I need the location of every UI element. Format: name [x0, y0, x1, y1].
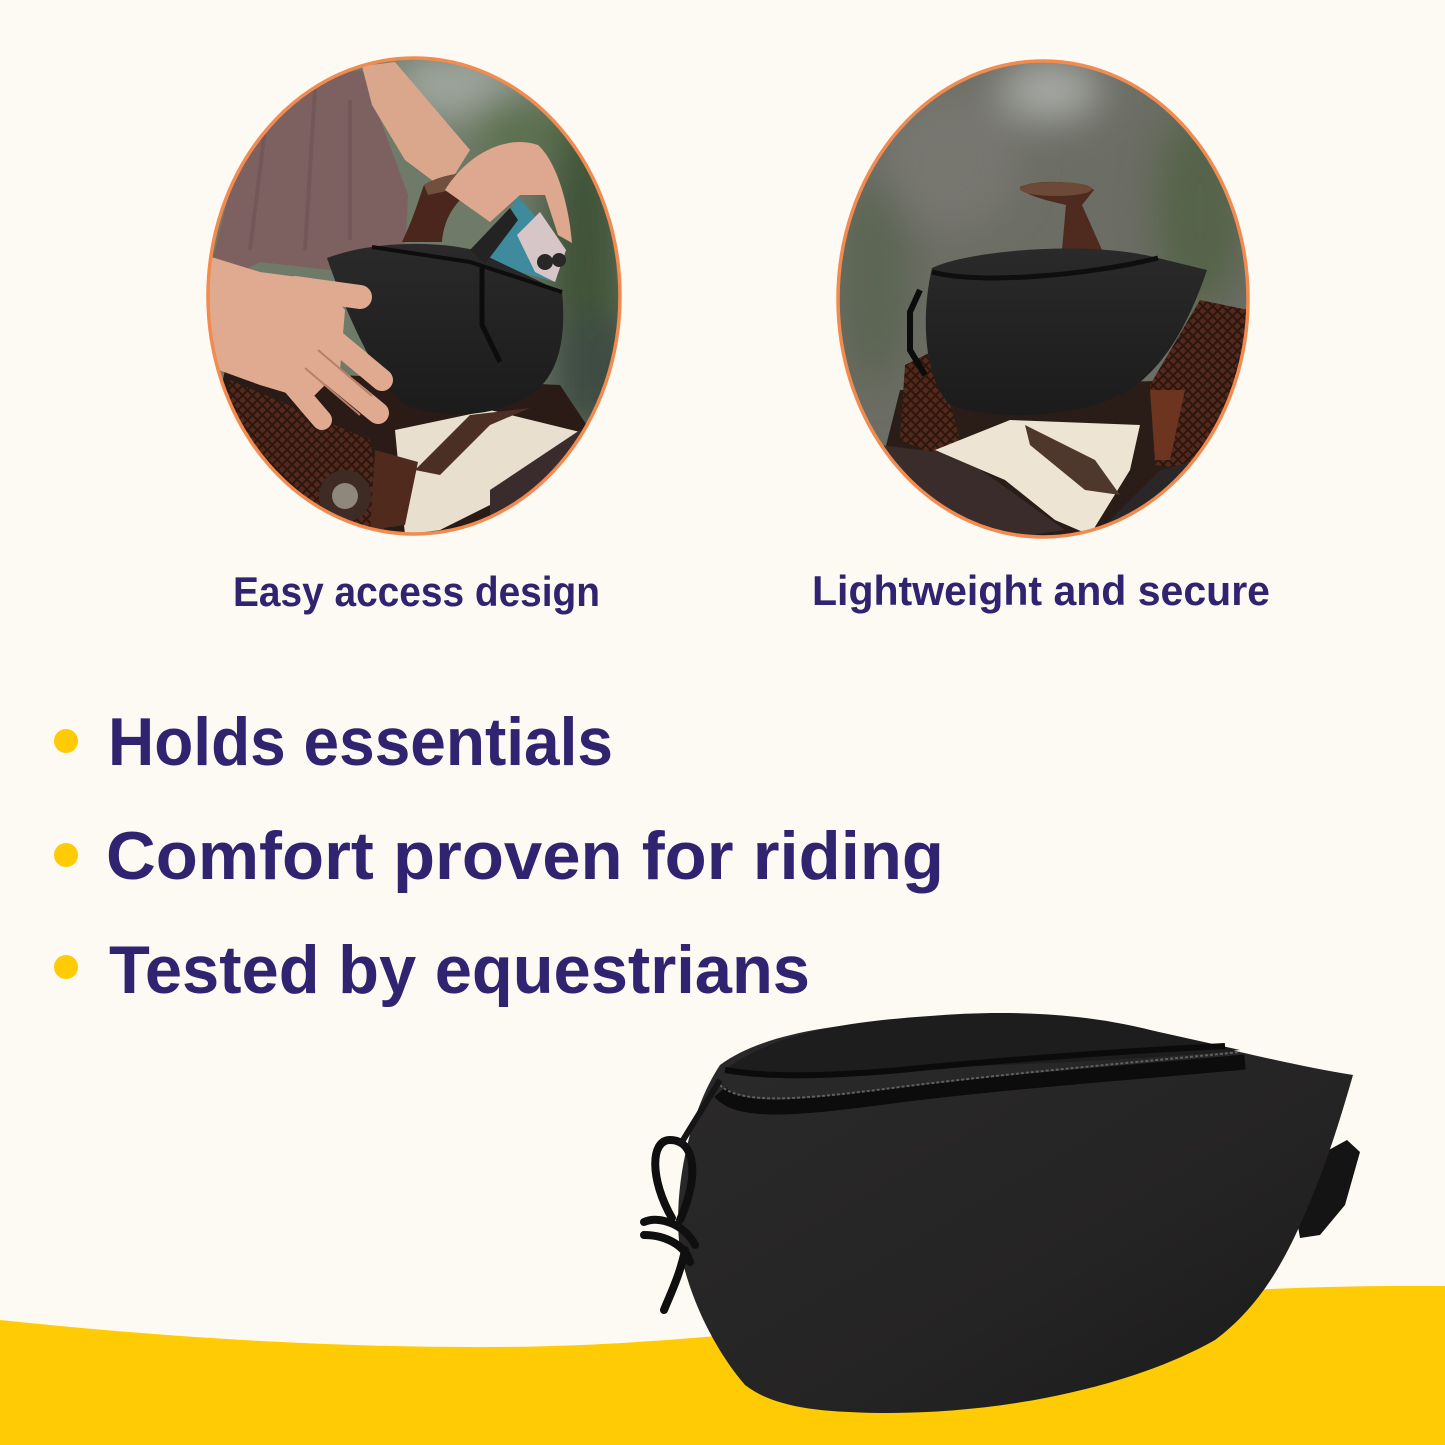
photo: lightweight and secure: [830, 55, 1260, 545]
shirt: [213, 70, 408, 270]
phone: [488, 196, 566, 282]
caption: lightweight and secure: Lightweight and secure: [812, 567, 1270, 614]
hand on phone: [445, 142, 572, 243]
bullet item: holds essentials: Holds essentials: [108, 704, 613, 780]
belt strap: [1296, 1140, 1360, 1238]
concho: [319, 470, 371, 522]
dark area beneath pouch: [886, 381, 1172, 536]
zipper: [720, 1062, 1245, 1107]
bullet item: tested by equestrians: Tested by equestrians: [109, 932, 810, 1008]
caption: easy access design: Easy access design: [233, 568, 600, 615]
horse and fleece: [884, 446, 1064, 534]
saddle leather: [900, 350, 960, 455]
bullet list: [54, 704, 944, 1008]
top panel: [725, 1013, 1240, 1072]
photo: easy access design: [200, 50, 640, 550]
bag body: [678, 1015, 1353, 1413]
pouch: [327, 244, 563, 414]
bullet item: comfort proven for riding: Comfort proven for riding: [106, 818, 944, 894]
cord toggle loop: [644, 1140, 695, 1310]
dark area beneath pouch: [223, 372, 586, 532]
upper arm: [362, 62, 470, 190]
hand on pouch: [205, 255, 382, 420]
product photo: black belt bag: [644, 1013, 1360, 1413]
pouch: [926, 249, 1207, 415]
saddle horn: [402, 174, 460, 242]
saddle leather and fleece: [220, 380, 385, 535]
yellow wave footer: [0, 1286, 1445, 1445]
saddle horn: [1020, 182, 1102, 250]
